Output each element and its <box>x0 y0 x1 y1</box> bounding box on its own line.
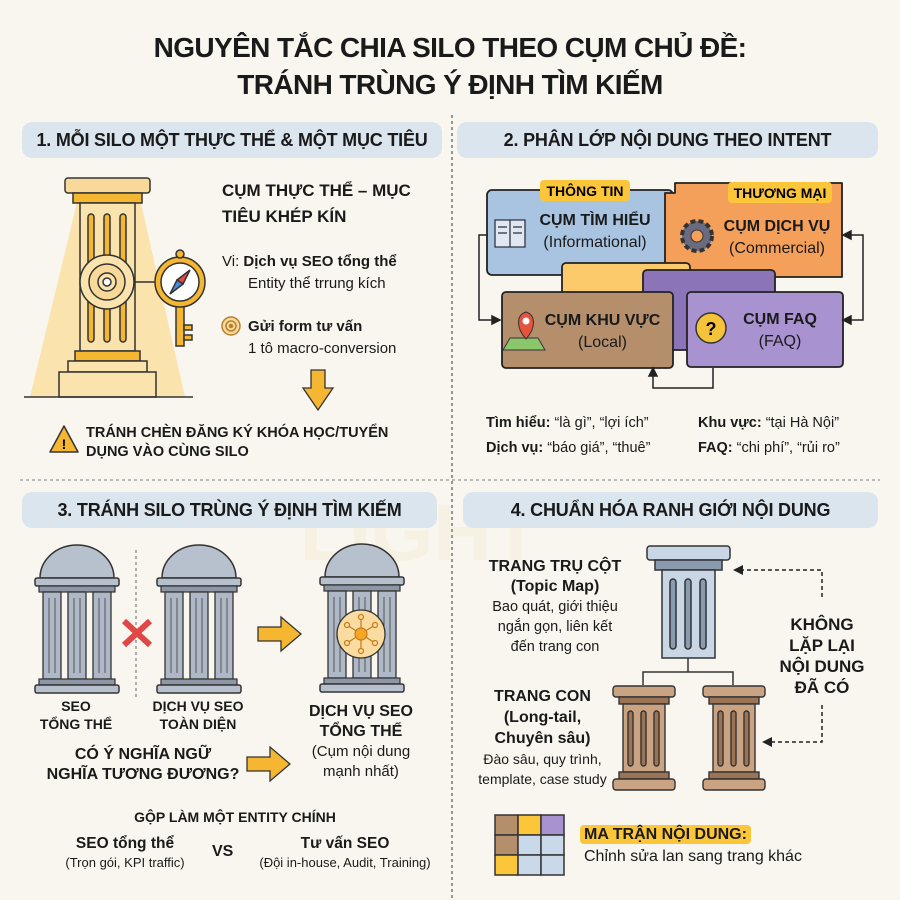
icon: warning: ! <box>62 436 66 452</box>
text: merged result: (Cụm nội dung <box>312 743 410 760</box>
text: intent examples: Dịch vụ: “báo giá”, “thuê” <box>486 440 650 456</box>
panel 1 header <box>22 122 442 158</box>
text: merged result: mạnh nhất) <box>323 763 399 780</box>
text: service cluster <box>724 218 830 257</box>
text: question <box>47 744 239 783</box>
text: dich vu toan dien label: DỊCH VỤ SEO <box>152 698 244 714</box>
arrow: merge <box>258 617 301 651</box>
panel 2 header: 2. PHÂN LỚP NỘI DUNG THEO INTENT <box>504 130 831 150</box>
text: sub page: template, case study <box>478 771 607 787</box>
text: question: CÓ Ý NGHĨA NGỮ <box>75 746 211 763</box>
text: comparison: SEO tổng thể <box>76 835 174 852</box>
text: pillar page: Bao quát, giới thiệu <box>492 599 618 615</box>
text: faq cluster: CỤM FAQ <box>743 311 817 328</box>
icon: pillar page column <box>643 546 733 685</box>
text: intent examples: Tìm hiểu: “là gì”, “lợi ích” <box>486 415 649 431</box>
text: conversion goal: 1 tô macro-conversion <box>248 340 396 357</box>
title <box>154 32 746 100</box>
text: local cluster: (Local) <box>578 334 627 351</box>
icon: gear <box>682 221 712 251</box>
text: no repeat: ĐÃ CÓ <box>795 678 849 697</box>
icon: compass key <box>155 250 205 346</box>
icon: book <box>495 220 525 247</box>
text: merge heading: GỘP LÀM MỘT ENTITY CHÍNH <box>134 809 336 825</box>
text: comparison: Tư vấn SEO <box>301 835 389 852</box>
text: closed cluster heading: TIÊU KHÉP KÍN <box>222 207 346 226</box>
text: sub page: TRANG CON <box>494 688 591 705</box>
title: TRÁNH TRÙNG Ý ĐỊNH TÌM KIẾM <box>237 69 663 100</box>
icon: merged temple with hub <box>320 544 404 692</box>
panel 4 header <box>463 492 878 528</box>
text: sub page: Chuyên sâu) <box>494 730 590 747</box>
text: cluster labels <box>539 211 651 251</box>
arrows: cycle <box>479 231 863 388</box>
text: faq cluster <box>743 311 817 350</box>
icon: question bubble <box>696 313 726 343</box>
text: pillar page: TRANG TRỤ CỘT <box>489 558 621 575</box>
title: NGUYÊN TẮC CHIA SILO THEO CỤM CHỦ ĐỀ: <box>154 32 746 63</box>
text: example entity <box>222 253 397 292</box>
icon: golden pillar with light beam <box>24 178 193 397</box>
watermark: LIGHT <box>300 488 540 577</box>
text: intent examples <box>486 415 840 456</box>
icon: red cross <box>124 621 150 645</box>
icon: sub page column left <box>613 686 675 790</box>
panel 2 header <box>457 122 878 158</box>
text: comparison <box>65 835 431 870</box>
text: no repeat: KHÔNG <box>790 615 854 634</box>
text: pillar page: ngắn gọn, liên kết <box>498 619 612 635</box>
text: closed cluster heading: CỤM THỰC THỂ – MỤC <box>222 181 411 200</box>
arrow: down <box>303 370 333 410</box>
text: merged result: DỊCH VỤ SEO <box>309 703 413 720</box>
panel 3 header <box>22 492 437 528</box>
text: dich vu toan dien label <box>152 698 244 732</box>
arrow: question to result <box>247 747 290 781</box>
text: no repeat <box>780 614 864 697</box>
label: thương mại <box>728 182 832 203</box>
icon: question bubble: ? <box>706 319 716 339</box>
text: conversion goal: Gửi form tư vấn <box>248 318 362 335</box>
text: question: NGHĨA TƯƠNG ĐƯƠNG? <box>47 766 239 783</box>
text: seo tong the label: TỔNG THỂ <box>40 716 112 732</box>
text: content matrix <box>580 824 802 865</box>
icon: temple dich vu toan dien <box>157 545 241 693</box>
text: example entity: Entity thể trrung kích <box>248 275 386 292</box>
text: service cluster: (Commercial) <box>729 240 825 257</box>
text: no repeat: NỘI DUNG <box>780 657 864 676</box>
text: content matrix: MA TRẬN NỘI DUNG: <box>584 826 747 843</box>
text: comparison: (Đội in-house, Audit, Training) <box>259 855 431 870</box>
text: pillar page: (Topic Map) <box>511 578 599 595</box>
label: thông tin: THÔNG TIN <box>546 182 624 199</box>
panel 3 header: 3. TRÁNH SILO TRÙNG Ý ĐỊNH TÌM KIẾM <box>57 500 402 520</box>
text: seo tong the label: SEO <box>61 698 91 714</box>
arrows: dashed no-repeat <box>733 565 822 747</box>
label: thương mại: THƯƠNG MẠI <box>734 185 826 201</box>
text: local cluster: CỤM KHU VỰC <box>545 312 660 329</box>
text: local cluster <box>545 312 660 351</box>
text: pillar page: đến trang con <box>511 639 599 655</box>
text: dich vu toan dien label: TOÀN DIỆN <box>160 716 236 732</box>
text: intent examples: FAQ: “chi phí”, “rủi ro” <box>698 440 840 456</box>
text: seo tong the label <box>40 698 112 732</box>
icon: content matrix <box>495 815 564 875</box>
icon: sub page column right <box>703 686 765 790</box>
text: cluster labels: CỤM TÌM HIỂU <box>539 212 651 229</box>
text: merged result: TỔNG THỂ <box>320 723 402 740</box>
text: faq cluster: (FAQ) <box>759 333 801 350</box>
text: service cluster: CỤM DỊCH VỤ <box>724 218 830 235</box>
text: pillar page <box>488 556 622 655</box>
text: sub page: Đào sâu, quy trình, <box>483 751 602 767</box>
text: intent examples: Khu vực: “tại Hà Nội” <box>698 415 839 431</box>
text: content matrix: Chỉnh sửa lan sang trang khác <box>584 848 802 865</box>
text: cluster labels: (Informational) <box>543 234 647 251</box>
text: no repeat: LẶP LẠI <box>789 636 855 655</box>
text: warning: TRÁNH CHÈN ĐĂNG KÝ KHÓA HỌC/TUYỂN <box>86 425 388 441</box>
text: comparison: VS <box>212 843 233 860</box>
text: sub page: (Long-tail, <box>504 709 581 726</box>
panel 1 header: 1. MỖI SILO MỘT THỰC THỂ & MỘT MỤC TIÊU <box>36 130 428 150</box>
label: thông tin <box>540 180 630 201</box>
text: example entity: Vi: Dịch vụ SEO tổng thể <box>222 253 397 270</box>
icon: target <box>222 317 240 335</box>
text: sub page <box>478 688 607 787</box>
panel 4 header: 4. CHUẨN HÓA RANH GIỚI NỘI DUNG <box>511 500 830 520</box>
text: warning <box>86 424 388 460</box>
text: conversion goal <box>248 318 396 357</box>
text: closed cluster heading <box>222 181 411 226</box>
icon: map pin <box>503 312 545 350</box>
icon: temple seo tong the <box>35 545 119 693</box>
text: warning: DỤNG VÀO CÙNG SILO <box>86 444 249 460</box>
icon: warning <box>50 426 78 452</box>
text: merged result <box>309 703 413 780</box>
text: comparison: (Trọn gói, KPI traffic) <box>65 855 185 870</box>
